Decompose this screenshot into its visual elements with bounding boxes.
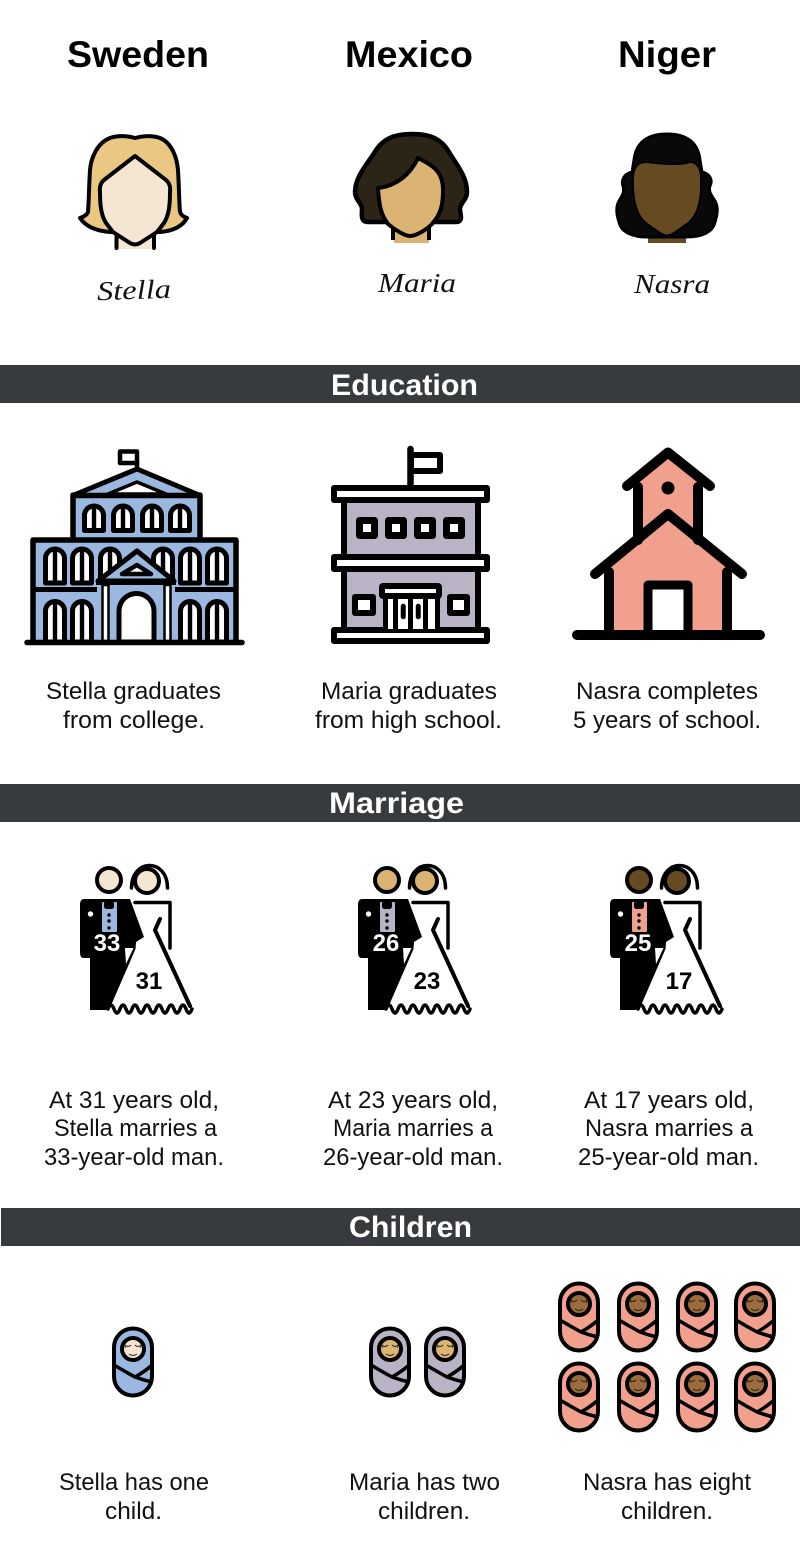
title: Mexico: Mexico [345, 34, 473, 75]
text: Maria education: Maria graduates [321, 678, 497, 705]
text: Maria education: from high school. [315, 707, 502, 734]
text: Nasra children: children. [621, 1498, 713, 1525]
section bar: Education [0, 365, 800, 403]
text: Maria marriage [323, 1087, 503, 1171]
icon: one-room schoolhouse [577, 452, 760, 635]
icon: Sweden couple with ages: 31 [136, 968, 162, 995]
text: Stella marriage [44, 1087, 224, 1171]
text: Stella children: Stella has one [59, 1469, 209, 1496]
name: Stella: Stella [96, 274, 171, 306]
section bar: Marriage [0, 784, 800, 822]
text: Nasra marriage: Nasra marries a [585, 1115, 754, 1142]
text: Stella marriage: Stella marries a [54, 1115, 218, 1142]
heading: Marriage: Marriage [329, 787, 464, 820]
icon: Stella one baby [114, 1328, 152, 1396]
text: Stella education: from college. [63, 707, 205, 734]
text: Nasra education: Nasra completes [576, 678, 758, 705]
icon: Nasra eight babies [560, 1284, 774, 1430]
heading: Education: Education [331, 369, 478, 402]
icon: Mexico couple with ages: 26 [373, 930, 399, 957]
heading: Children: Children [349, 1211, 472, 1244]
icon: Niger couple with ages: 25 [625, 930, 651, 957]
text: Maria marriage: At 23 years old, [328, 1087, 498, 1114]
text: Nasra marriage [578, 1087, 759, 1171]
text: Stella children: child. [105, 1498, 162, 1525]
icon: Sweden couple with ages [80, 866, 192, 1013]
name: Maria: Maria [377, 268, 456, 298]
text: Nasra education [573, 678, 761, 734]
name: Nasra: Nasra [633, 269, 710, 299]
section bar: Children [1, 1208, 800, 1246]
text: Nasra children [583, 1469, 751, 1525]
icon: Niger couple with ages [610, 866, 722, 1013]
text: Stella marriage: At 31 years old, [49, 1087, 219, 1114]
text: Maria children [349, 1469, 500, 1525]
text: Maria children: children. [378, 1498, 470, 1525]
icon: college building [27, 452, 242, 642]
text: Stella education [46, 678, 221, 734]
text: Maria marriage: Maria marries a [333, 1115, 494, 1142]
icon: Maria portrait [355, 134, 467, 243]
text: Stella marriage: 33-year-old man. [44, 1144, 224, 1171]
icon: Stella portrait [80, 136, 187, 249]
icon: Mexico couple with ages [358, 866, 470, 1013]
text: Nasra marriage: 25-year-old man. [578, 1144, 759, 1171]
text: Maria children: Maria has two [349, 1469, 500, 1496]
title: Sweden: Sweden [67, 34, 209, 75]
text: Nasra children: Nasra has eight [583, 1469, 751, 1496]
text: Maria education [315, 678, 502, 734]
title: Niger: Niger [618, 34, 716, 75]
text: Nasra education: 5 years of school. [573, 707, 761, 734]
text: Nasra marriage: At 17 years old, [584, 1087, 754, 1114]
icon: high school building [334, 449, 487, 641]
icon: Mexico couple with ages: 23 [414, 968, 440, 995]
icon: Maria two babies [371, 1328, 464, 1396]
icon: Sweden couple with ages: 33 [94, 930, 120, 957]
icon: Niger couple with ages: 17 [666, 968, 692, 995]
icon: Nasra portrait [617, 134, 717, 243]
text: Maria marriage: 26-year-old man. [323, 1144, 503, 1171]
text: Stella children [59, 1469, 209, 1525]
text: Stella education: Stella graduates [46, 678, 221, 705]
